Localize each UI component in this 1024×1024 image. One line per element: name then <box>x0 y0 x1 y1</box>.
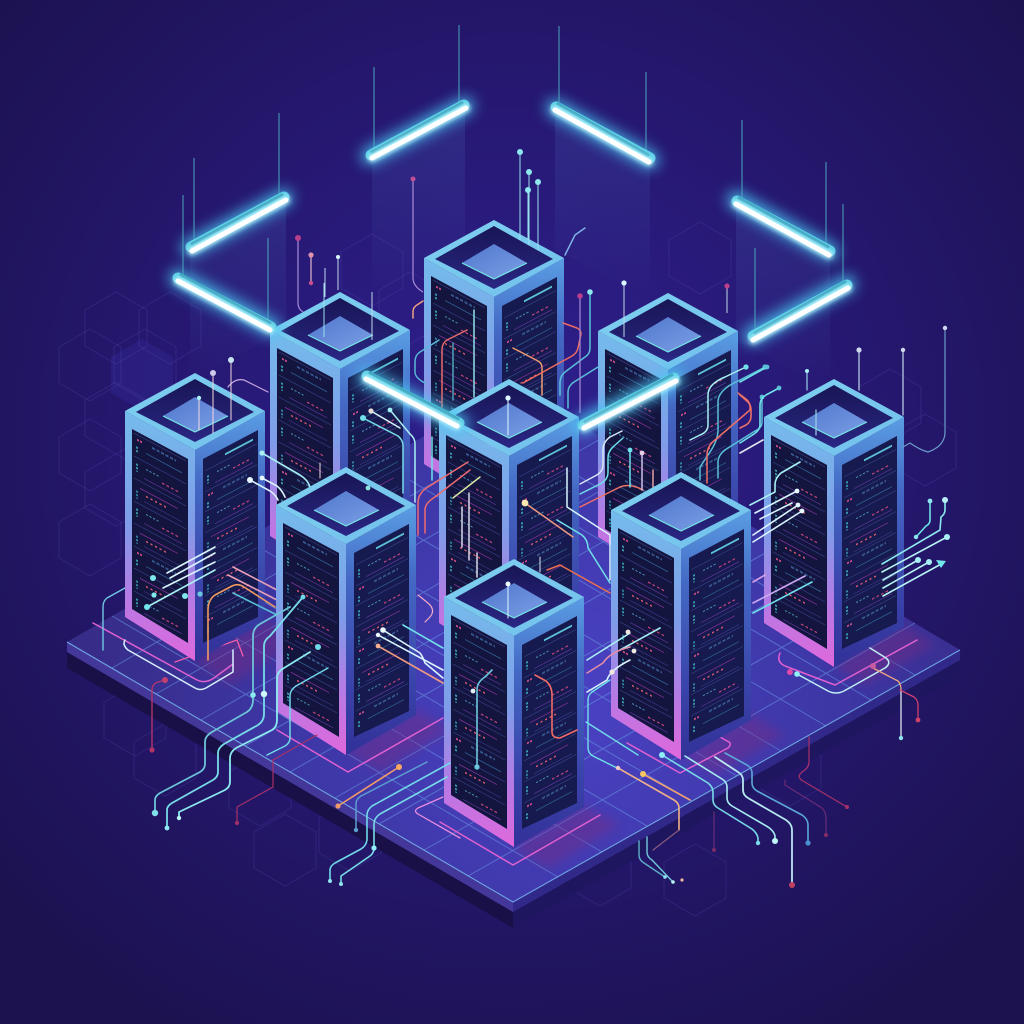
bar top faces <box>181 103 845 422</box>
bar inner glow <box>178 108 848 428</box>
cables on back centre rack <box>413 228 598 408</box>
rack: front centre <box>444 559 584 847</box>
rack: back left <box>270 292 410 580</box>
light beams <box>190 110 830 390</box>
antennas above back racks <box>295 149 730 413</box>
rack: middle right <box>611 472 751 760</box>
rack: front left <box>125 373 265 661</box>
left lower cables <box>152 597 450 884</box>
cables on middle racks <box>366 486 660 692</box>
faint hexagon pattern <box>59 222 956 916</box>
rack floor shadows <box>195 620 935 868</box>
cables on centre rack <box>418 395 610 583</box>
cables on front centre rack <box>477 557 610 767</box>
rack: far right <box>764 379 904 667</box>
cable end dots <box>149 582 920 888</box>
hanging wires <box>183 25 843 330</box>
cables on back left and right racks <box>360 364 768 507</box>
cables on front left and far right racks <box>144 326 950 660</box>
light bars <box>178 103 848 428</box>
floor circuit traces <box>93 578 918 865</box>
right lower cables <box>618 737 847 885</box>
bar white strips <box>178 108 848 428</box>
light bar outer glow <box>178 106 847 425</box>
rack: middle left <box>276 467 416 755</box>
bar bodies <box>178 105 847 425</box>
rack: back right <box>598 293 738 581</box>
rack: centre <box>439 379 579 667</box>
rack: back centre <box>424 220 564 508</box>
floor platform <box>67 385 960 928</box>
